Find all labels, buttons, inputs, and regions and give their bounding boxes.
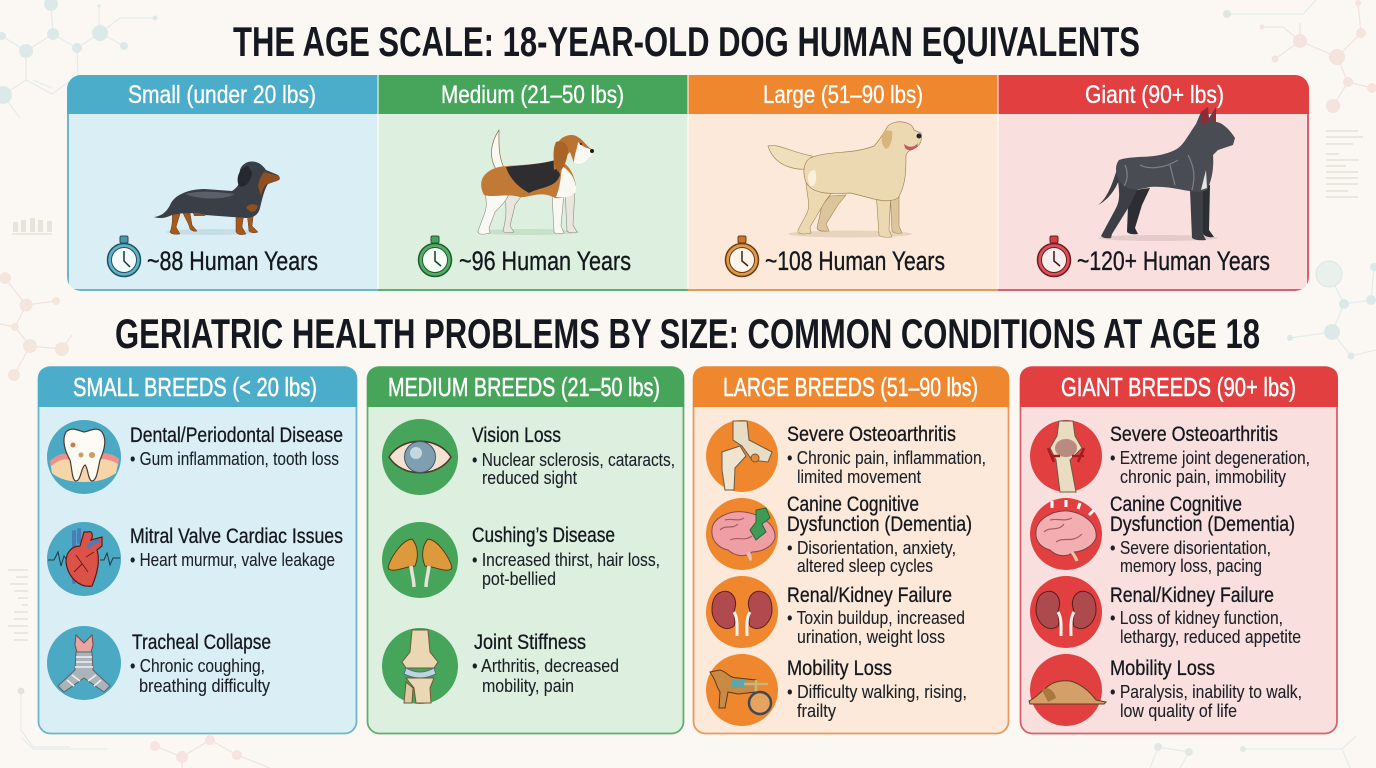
item: severe osteoarthritis: Severe Osteoarthritis	[787, 422, 956, 446]
item: cognitive dysfunction	[706, 492, 972, 576]
item: tracheal collapse: breathing difficulty	[139, 675, 271, 696]
item: cognitive dysfunction: altered sleep cycles	[797, 555, 933, 576]
item: severe osteoarthritis	[706, 420, 986, 492]
item: kidney failure: Renal/Kidney Failure	[1110, 583, 1274, 607]
column: giant: ~120+ Human Years	[1077, 246, 1270, 276]
item: mitral valve: • Heart murmur, valve leakage	[130, 549, 335, 570]
icon: orange stopwatch	[726, 236, 758, 276]
column: large	[726, 81, 945, 276]
panel: large breeds	[693, 367, 1009, 734]
item: mobility loss: • Difficulty walking, rising,	[787, 681, 967, 702]
item: kidney failure	[706, 576, 965, 648]
item: mobility loss: low quality of life	[1120, 700, 1237, 721]
item: cushing's disease: • Increased thirst, hair loss,	[472, 549, 660, 570]
icon: labrador	[768, 122, 922, 238]
item: kidney failure: • Toxin buildup, increased	[787, 607, 965, 628]
item: cognitive dysfunction: Dysfunction (Dementia)	[1110, 512, 1295, 536]
item: cognitive dysfunction: memory loss, pacing	[1120, 555, 1262, 576]
icon: dachshund	[154, 161, 280, 235]
panel: giant breeds: GIANT BREEDS (90+ lbs)	[1061, 372, 1296, 402]
item: severe osteoarthritis: chronic pain, immobility	[1120, 466, 1287, 487]
item: cushing's disease: pot-bellied	[482, 568, 556, 589]
item: tracheal collapse	[47, 626, 271, 700]
icon: kidneys	[706, 576, 778, 648]
column: small	[108, 81, 318, 276]
item: cognitive dysfunction: • Disorientation, anxiety,	[787, 537, 956, 558]
item: severe osteoarthritis: Severe Osteoarthritis	[1110, 422, 1278, 446]
panel: medium breeds	[367, 367, 684, 734]
column: medium: ~96 Human Years	[459, 246, 631, 276]
item: mobility loss: Mobility Loss	[787, 656, 892, 680]
item: kidney failure: • Loss of kidney function,	[1110, 607, 1283, 628]
icon: heart	[47, 522, 121, 596]
icon: adrenal glands	[382, 522, 458, 598]
item: kidney failure: Renal/Kidney Failure	[787, 583, 952, 607]
panel: small breeds: SMALL BREEDS (< 20 lbs)	[73, 372, 317, 402]
panel: large breeds: LARGE BREEDS (51–90 lbs)	[723, 372, 978, 402]
item: mobility loss: frailty	[797, 700, 837, 721]
icon: trachea	[47, 626, 121, 700]
icon: red stopwatch	[1038, 236, 1070, 276]
item: cognitive dysfunction	[1030, 492, 1295, 576]
item: tracheal collapse: Tracheal Collapse	[132, 630, 271, 654]
column: large: Large (51–90 lbs)	[763, 81, 923, 109]
item: joint stiffness: Joint Stiffness	[474, 630, 586, 654]
panel: medium breeds: MEDIUM BREEDS (21–50 lbs)	[388, 372, 660, 402]
panel: giant breeds	[1020, 367, 1338, 734]
icon: beagle	[476, 130, 594, 235]
icon: dog in wheelchair	[706, 654, 778, 726]
item: mobility loss: • Paralysis, inability to walk,	[1110, 681, 1302, 702]
icon: knee joint	[382, 628, 458, 704]
item: cushing's disease	[382, 522, 660, 598]
item: dental disease	[47, 420, 343, 494]
item: kidney failure	[1030, 576, 1301, 648]
item: cognitive dysfunction: Canine Cognitive	[1110, 492, 1242, 516]
item: mobility loss: Mobility Loss	[1110, 656, 1215, 680]
panel: small breeds	[38, 367, 357, 734]
item: vision loss: reduced sight	[482, 467, 577, 488]
icon: lying dog	[1029, 654, 1106, 726]
column: small: ~88 Human Years	[147, 246, 318, 276]
item: joint stiffness: mobility, pain	[482, 675, 574, 696]
icon: green stopwatch	[418, 236, 452, 276]
item: dental disease: • Gum inflammation, tooth loss	[130, 448, 339, 469]
item: vision loss: Vision Loss	[472, 423, 561, 447]
icon: eye	[382, 419, 458, 495]
item: cognitive dysfunction: Dysfunction (Dementia)	[787, 512, 972, 536]
item: mobility loss	[1029, 654, 1302, 726]
icon: kidneys	[1030, 576, 1102, 648]
panel: age scale table	[67, 75, 1309, 291]
item: severe osteoarthritis: • Extreme joint degeneration,	[1110, 447, 1310, 468]
icon: blue stopwatch	[108, 236, 140, 276]
item: severe osteoarthritis: limited movement	[797, 466, 921, 487]
item: vision loss	[382, 419, 675, 495]
icon: great dane	[1098, 107, 1235, 241]
item: kidney failure: urination, weight loss	[797, 626, 945, 647]
column: large: ~108 Human Years	[765, 246, 945, 276]
item: mitral valve: Mitral Valve Cardiac Issues	[130, 524, 343, 548]
item: vision loss: • Nuclear sclerosis, cataracts,	[472, 449, 675, 470]
column: medium	[418, 81, 631, 276]
item: cognitive dysfunction: Canine Cognitive	[787, 492, 919, 516]
column: giant: Giant (90+ lbs)	[1085, 81, 1224, 109]
item: joint stiffness	[382, 628, 619, 704]
item: severe osteoarthritis	[1030, 420, 1310, 492]
icon: damaged knee	[1030, 420, 1102, 492]
item: kidney failure: lethargy, reduced appetite	[1120, 626, 1301, 647]
icon: brain	[706, 498, 778, 570]
item: cognitive dysfunction: • Severe disorientation,	[1110, 537, 1271, 558]
icon: hip joint	[706, 420, 778, 492]
item: mobility loss	[706, 654, 967, 726]
item: severe osteoarthritis: • Chronic pain, inflammation,	[787, 447, 986, 468]
column: giant	[1038, 81, 1270, 276]
icon: brain with arrows	[1030, 498, 1102, 570]
icon: tooth	[47, 420, 121, 494]
column: small: Small (under 20 lbs)	[128, 81, 316, 109]
item: mitral valve	[47, 522, 343, 596]
item: tracheal collapse: • Chronic coughing,	[130, 655, 265, 676]
item: dental disease: Dental/Periodontal Disease	[130, 423, 343, 447]
item: joint stiffness: • Arthritis, decreased	[472, 655, 619, 676]
column: medium: Medium (21–50 lbs)	[441, 81, 624, 109]
item: cushing's disease: Cushing’s Disease	[472, 523, 615, 547]
